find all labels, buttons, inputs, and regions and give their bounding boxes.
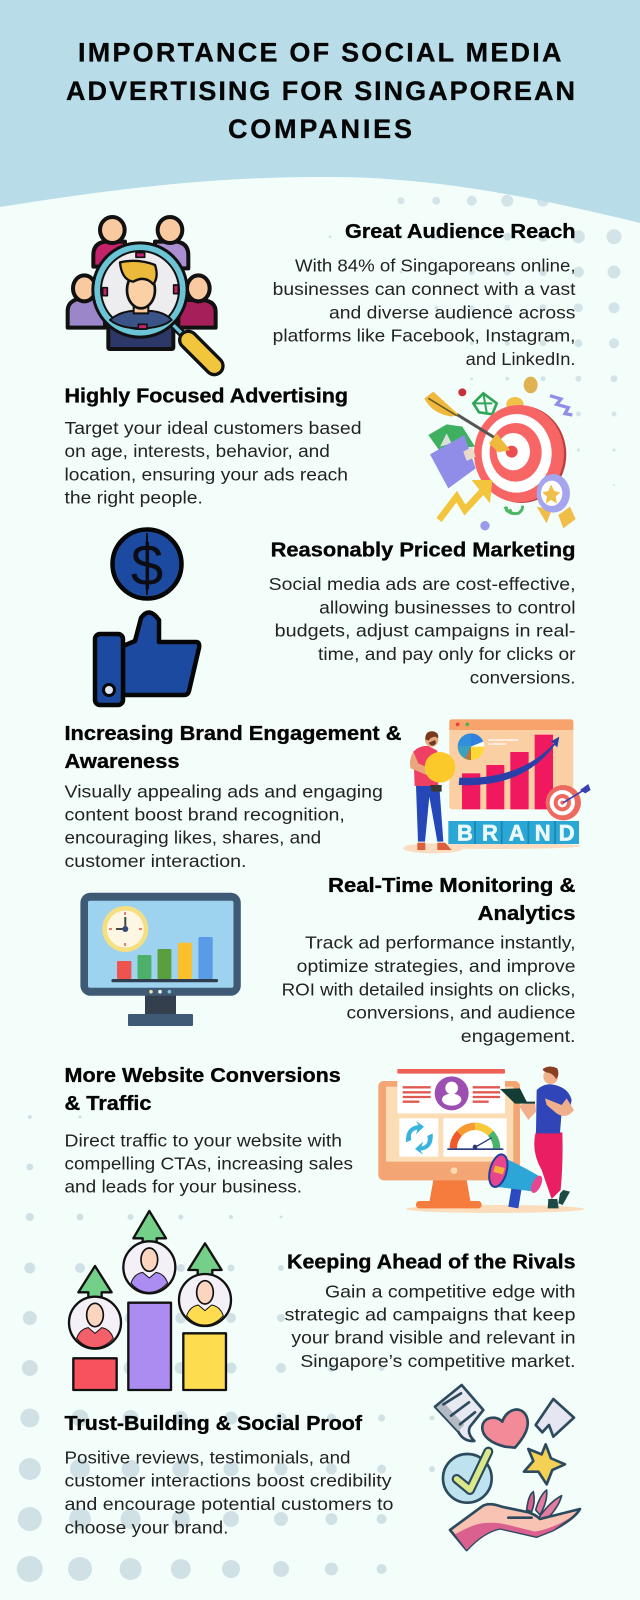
header wave bbox=[0, 0, 640, 223]
text block: time, and pay only for clicks or bbox=[318, 644, 576, 664]
text block: allowing businesses to control bbox=[319, 597, 576, 617]
text block: location, ensuring your ads reach bbox=[64, 464, 348, 484]
text block: choose your brand. bbox=[64, 1517, 228, 1537]
icon: dollar coin and thumbs up bbox=[95, 530, 199, 705]
text block: optimize strategies, and improve bbox=[297, 956, 576, 976]
heading bbox=[328, 874, 576, 925]
text block: Direct traffic to your website with bbox=[64, 1130, 342, 1150]
panel: real-time monitoring bbox=[80, 874, 576, 1046]
text block: conversions. bbox=[470, 667, 576, 687]
text block: Positive reviews, testimonials, and bbox=[64, 1448, 350, 1468]
panel: brand engagement bbox=[64, 719, 591, 871]
text block: strategic ad campaigns that keep bbox=[284, 1305, 576, 1325]
icon: monitor with chart and clock bbox=[80, 893, 241, 1026]
text block: the right people. bbox=[64, 488, 203, 508]
text block: and diverse audience across bbox=[329, 302, 576, 322]
text block: content boost brand recognition, bbox=[64, 804, 345, 824]
title bbox=[66, 38, 575, 144]
heading: Reasonably Priced Marketing bbox=[271, 539, 576, 562]
text block: and leads for your business. bbox=[64, 1177, 302, 1197]
icon: dollar coin and thumbs up: $ bbox=[131, 533, 163, 598]
heading: Trust-Building & Social Proof bbox=[64, 1412, 362, 1435]
text block: engagement. bbox=[461, 1026, 576, 1046]
text block: and encourage potential customers to bbox=[64, 1494, 394, 1514]
text block: encouraging likes, shares, and bbox=[64, 828, 321, 848]
text block: businesses can connect with a vast bbox=[273, 279, 576, 299]
panel: reasonably priced marketing bbox=[95, 530, 576, 705]
title: COMPANIES bbox=[228, 114, 412, 144]
icon: magnifier over audience bbox=[68, 217, 216, 366]
icon: target with arrow bbox=[424, 377, 576, 530]
text block bbox=[64, 418, 362, 508]
text block: on age, interests, behavior, and bbox=[64, 441, 330, 461]
panel: trust-building bbox=[64, 1385, 580, 1550]
heading: Real-Time Monitoring & bbox=[328, 874, 576, 897]
panel: keeping ahead of rivals bbox=[69, 1211, 576, 1390]
text block bbox=[64, 1130, 353, 1197]
text block: Visually appealing ads and engaging bbox=[64, 781, 383, 801]
icon: monitor dashboard with man and megaphone bbox=[378, 1066, 584, 1213]
heading bbox=[64, 1064, 341, 1115]
text block: Gain a competitive edge with bbox=[325, 1281, 576, 1301]
text block bbox=[273, 256, 576, 369]
text block bbox=[64, 781, 383, 871]
heading: Awareness bbox=[64, 750, 180, 773]
text block: and LinkedIn. bbox=[466, 349, 576, 369]
heading: & Traffic bbox=[64, 1092, 152, 1115]
text block: your brand visible and relevant in bbox=[291, 1328, 576, 1348]
text block: Track ad performance instantly, bbox=[305, 933, 576, 953]
icon: brand growth chart bbox=[403, 719, 591, 853]
text block: ROI with detailed insights on clicks, bbox=[282, 979, 576, 999]
text block: budgets, adjust campaigns in real- bbox=[275, 621, 576, 641]
panel: highly focused advertising bbox=[64, 377, 576, 530]
text block: platforms like Facebook, Instagram, bbox=[273, 326, 576, 346]
heading: Highly Focused Advertising bbox=[64, 385, 348, 408]
text block: Singapore’s competitive market. bbox=[300, 1351, 576, 1371]
text block: customer interaction. bbox=[64, 851, 246, 871]
text block bbox=[269, 574, 576, 687]
text block: compelling CTAs, increasing sales bbox=[64, 1154, 353, 1174]
heading: Increasing Brand Engagement & bbox=[64, 722, 402, 745]
heading: Analytics bbox=[478, 902, 576, 925]
icon: brand growth chart: BRAND bbox=[457, 821, 575, 846]
text block bbox=[282, 933, 576, 1046]
panel: great audience reach bbox=[68, 217, 576, 369]
text block: customer interactions boost credibility bbox=[64, 1471, 392, 1491]
text block bbox=[284, 1281, 576, 1371]
title: IMPORTANCE OF SOCIAL MEDIA bbox=[78, 38, 562, 68]
text block: With 84% of Singaporeans online, bbox=[295, 256, 576, 276]
icon: ranked people on bars bbox=[69, 1211, 231, 1390]
icon: reviews, heart, star and hand bbox=[435, 1385, 580, 1550]
title: ADVERTISING FOR SINGAPOREAN bbox=[66, 76, 575, 106]
heading: Keeping Ahead of the Rivals bbox=[287, 1251, 576, 1274]
panel: website conversions bbox=[64, 1064, 584, 1213]
heading: More Website Conversions bbox=[64, 1064, 341, 1087]
text block: conversions, and audience bbox=[346, 1003, 576, 1023]
heading bbox=[64, 722, 402, 773]
text block: Target your ideal customers based bbox=[64, 418, 362, 438]
heading: Great Audience Reach bbox=[345, 220, 576, 243]
text block bbox=[64, 1448, 394, 1537]
text block: Social media ads are cost-effective, bbox=[269, 574, 576, 594]
